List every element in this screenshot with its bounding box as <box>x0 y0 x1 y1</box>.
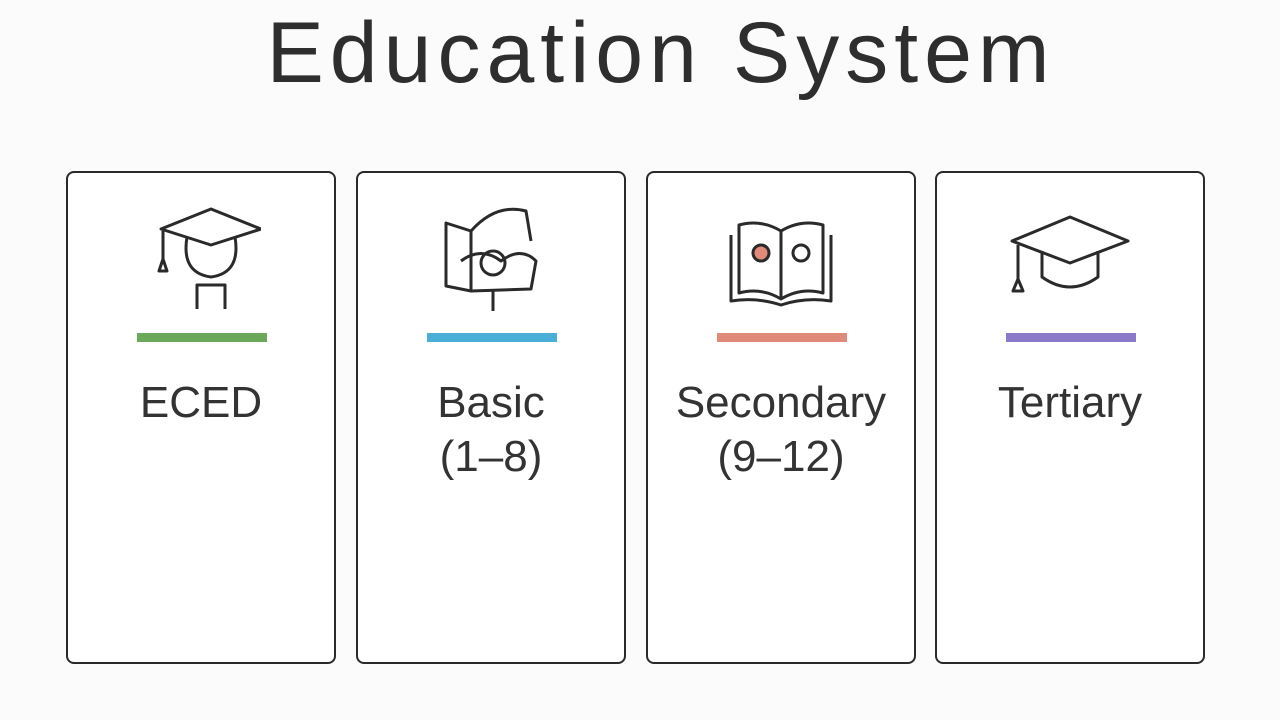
panel: Basic <box>356 171 626 664</box>
color bar <box>427 333 557 342</box>
label: (9–12) <box>717 432 845 481</box>
label: ECED <box>140 378 262 427</box>
label <box>437 378 545 481</box>
label: Basic <box>437 378 545 427</box>
label <box>676 378 886 481</box>
icon: school sketch <box>444 208 538 311</box>
panel: Secondary <box>646 171 916 664</box>
title: Education System <box>266 5 1056 101</box>
label: (1–8) <box>440 432 542 481</box>
panel: ECED <box>66 171 336 664</box>
color bar <box>717 333 847 342</box>
label: Tertiary <box>998 378 1142 427</box>
color bar <box>137 333 267 342</box>
label: Secondary <box>676 378 886 427</box>
color bar <box>1006 333 1136 342</box>
panel: Tertiary <box>935 171 1205 664</box>
icon: graduate person <box>158 208 261 309</box>
icon: graduation cap <box>1010 216 1130 292</box>
icon: open book <box>730 222 832 306</box>
